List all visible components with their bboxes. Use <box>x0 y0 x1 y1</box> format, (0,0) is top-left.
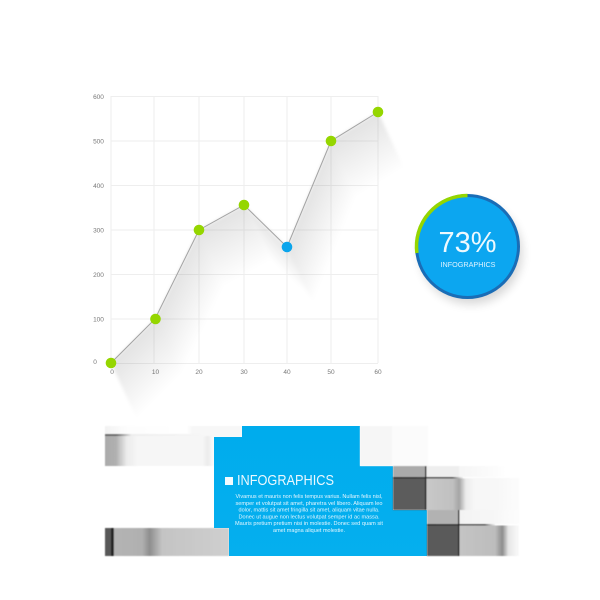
gray blocks right <box>360 426 519 556</box>
banner body text <box>235 494 383 534</box>
y axis labels: 300 <box>93 228 104 234</box>
y axis labels: 400 <box>93 183 104 190</box>
percent value: 73% <box>438 227 496 259</box>
x axis labels: 20 <box>195 369 203 376</box>
connector line to circle <box>287 246 416 248</box>
circle label: INFOGRAPHICS <box>440 260 496 269</box>
y axis labels: 0 <box>93 359 97 366</box>
y axis labels: 500 <box>93 138 104 146</box>
bullet square <box>225 477 233 485</box>
data line <box>111 112 378 363</box>
y axis labels: 100 <box>93 316 104 324</box>
x axis labels: 50 <box>327 369 335 376</box>
banner body text: Mauris pretium pretium nisi in molestie. Donec sed quam sit <box>235 521 383 527</box>
banner body text: semper et volutpat sit amet, pharetra vel libero. Aliquam leo <box>236 501 382 507</box>
y axis labels: 600 <box>93 94 104 101</box>
x axis labels: 0 <box>110 369 114 376</box>
y axis labels <box>93 94 104 366</box>
banner body text: amet magna aliquet molestie. <box>273 528 345 534</box>
green progress arc <box>416 196 468 253</box>
circle fill <box>416 196 518 298</box>
chart grid <box>111 96 378 364</box>
banner heading: INFOGRAPHICS <box>237 472 334 489</box>
banner body text: Vivamus et mauris non felis tempus varius. Nullam felis nisl, <box>236 494 383 500</box>
x axis labels: 30 <box>240 369 248 376</box>
banner body text: Donec ut augue non lectus volutpat semper id ac massa. <box>238 514 380 520</box>
y axis labels: 200 <box>93 272 104 279</box>
line chart <box>93 94 416 419</box>
x axis labels: 10 <box>152 369 159 376</box>
long shadow under line <box>111 112 404 419</box>
x axis labels: 60 <box>374 369 382 376</box>
x axis labels <box>110 369 382 376</box>
circle shadow <box>420 202 522 304</box>
banner <box>105 426 519 556</box>
gray blocks left <box>105 426 242 556</box>
blue data point <box>282 242 292 252</box>
banner body text: dolor, mattis sit amet fringilla sit amet, aliquam vitae nulla. <box>238 508 380 514</box>
green data points <box>106 107 383 368</box>
x axis labels: 40 <box>283 369 291 376</box>
percentage circle <box>416 196 522 304</box>
blue panel <box>214 426 427 556</box>
